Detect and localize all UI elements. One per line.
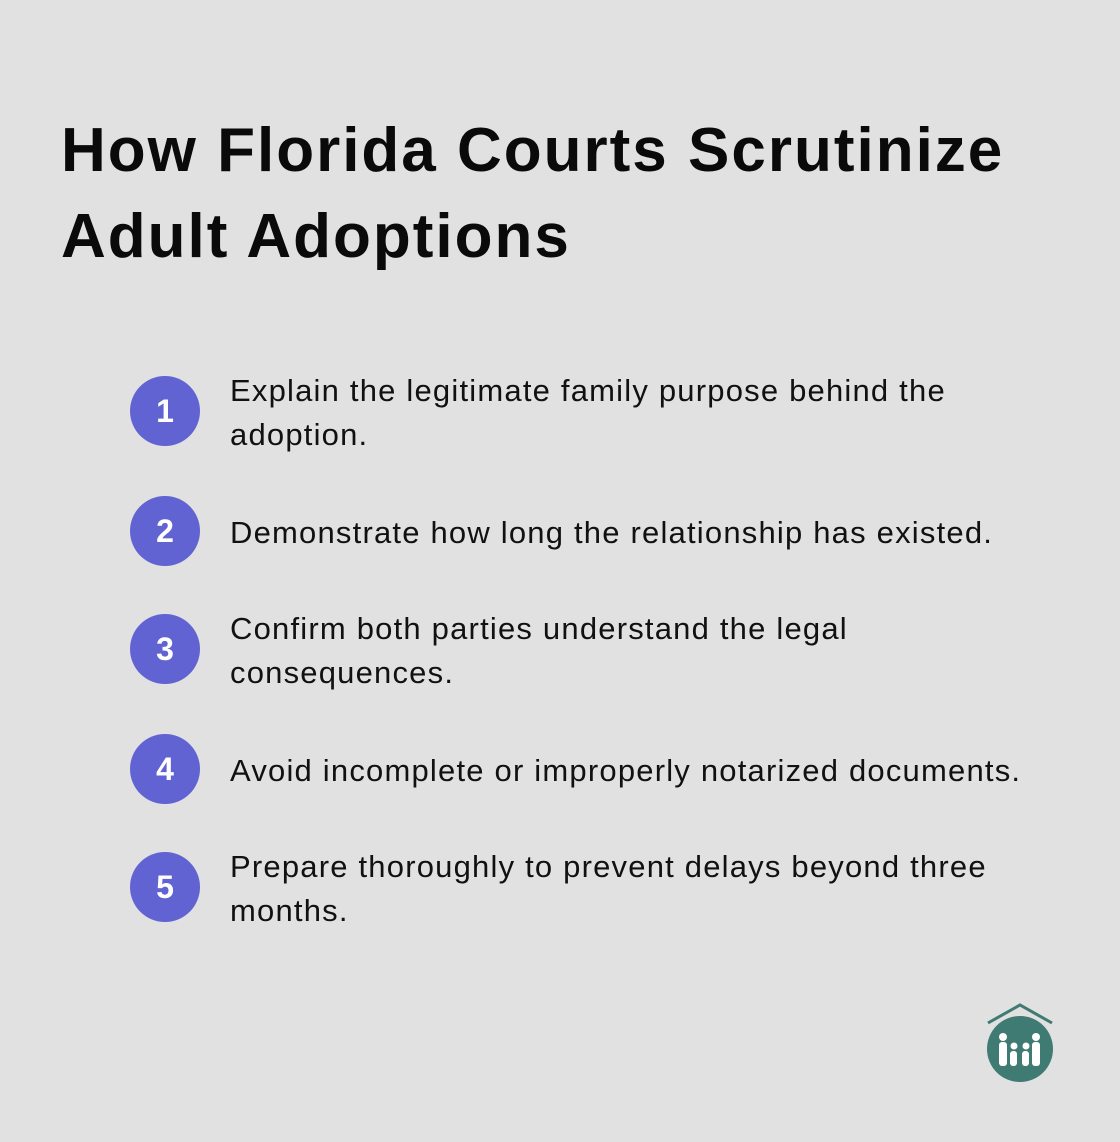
- item 1: 1: [156, 393, 174, 429]
- item 3: 3: [156, 631, 174, 667]
- item 4: [130, 734, 1021, 804]
- item 2: 2: [156, 513, 174, 549]
- item 4: Avoid incomplete or improperly notarized documents.: [230, 753, 1021, 788]
- title: Adult Adoptions: [61, 202, 571, 271]
- item 3: [130, 611, 848, 690]
- item 2: [130, 496, 993, 566]
- item 1: Explain the legitimate family purpose behind the: [230, 373, 946, 408]
- title: [61, 116, 1004, 271]
- item 1: adoption.: [230, 417, 368, 452]
- item 4: 4: [156, 751, 174, 787]
- item 5: Prepare thoroughly to prevent delays beyond three: [230, 849, 987, 884]
- item 5: 5: [156, 869, 174, 905]
- title: How Florida Courts Scrutinize: [61, 116, 1004, 185]
- item 5: months.: [230, 893, 349, 928]
- item 5: [130, 849, 987, 928]
- item 1: [130, 373, 946, 452]
- item 3: Confirm both parties understand the legal: [230, 611, 848, 646]
- item 3: consequences.: [230, 655, 454, 690]
- item 2: Demonstrate how long the relationship has existed.: [230, 515, 993, 550]
- logo: [987, 1003, 1053, 1082]
